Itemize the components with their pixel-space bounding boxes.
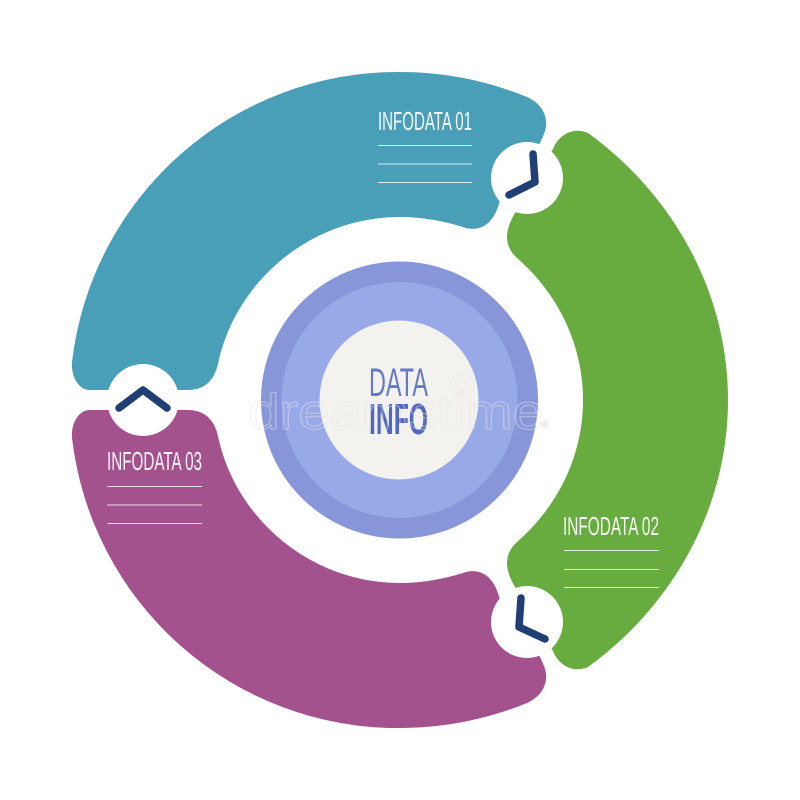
heading: infodata 02: INFODATA 02 xyxy=(563,513,659,541)
panel: infodata 02 green segment xyxy=(507,131,728,669)
heading: infodata 03: INFODATA 03 xyxy=(107,448,202,476)
icon: arrow connector 01 to 02 xyxy=(491,142,563,214)
center title: data: DATA xyxy=(369,361,428,405)
text lines: infodata 03 xyxy=(107,486,202,524)
center hub xyxy=(261,262,538,538)
heading: infodata 01: INFODATA 01 xyxy=(378,108,472,136)
icon: arrow connector 03 to 01 xyxy=(107,364,179,436)
panel: infodata 01 teal segment xyxy=(72,72,546,390)
watermark: dreamstime xyxy=(248,384,544,440)
text lines: infodata 01 xyxy=(378,146,472,182)
text lines: infodata 02 xyxy=(564,550,659,588)
panel: infodata 03 purple segment xyxy=(72,410,546,728)
center title: info: INFO xyxy=(369,395,428,444)
icon: arrow connector 02 to 03 xyxy=(491,586,563,658)
